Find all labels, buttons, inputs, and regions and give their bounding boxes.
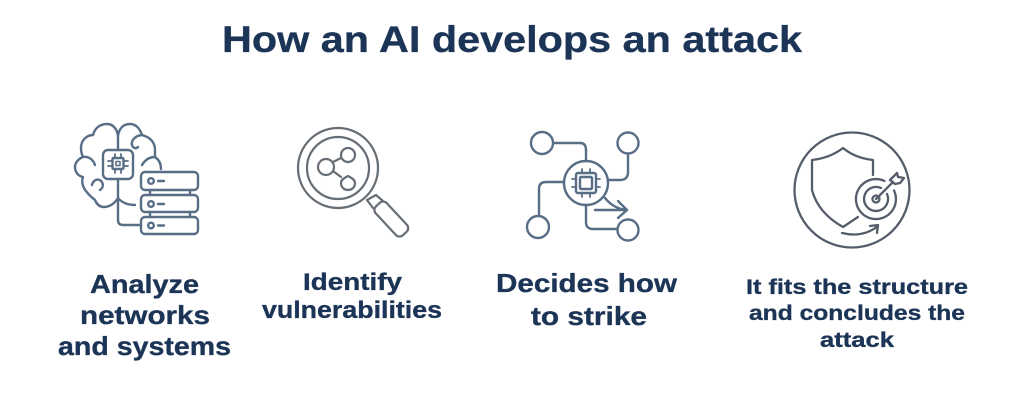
icon: chip network	[527, 132, 638, 240]
label: analyze: and systems	[58, 331, 231, 361]
label: concludes: It fits the structure	[746, 276, 968, 299]
label: concludes: attack	[820, 329, 894, 352]
icon: brain with chip and servers	[75, 124, 198, 234]
icon: magnifying glass	[298, 128, 410, 239]
label: analyze: Analyze	[90, 269, 199, 299]
label: identify: Identify	[303, 269, 403, 296]
label: identify: vulnerabilities	[262, 297, 442, 324]
label: decides: Decides how	[496, 268, 678, 298]
label: analyze: networks	[80, 300, 210, 330]
label: concludes	[746, 276, 968, 352]
label: analyze	[58, 269, 231, 361]
label: decides	[496, 268, 678, 331]
label: decides: to strike	[531, 301, 647, 331]
title: How an AI develops an attack	[222, 19, 802, 60]
icon: shield and target	[794, 132, 910, 248]
label: concludes: and concludes the	[749, 302, 965, 325]
label: identify	[262, 269, 442, 324]
